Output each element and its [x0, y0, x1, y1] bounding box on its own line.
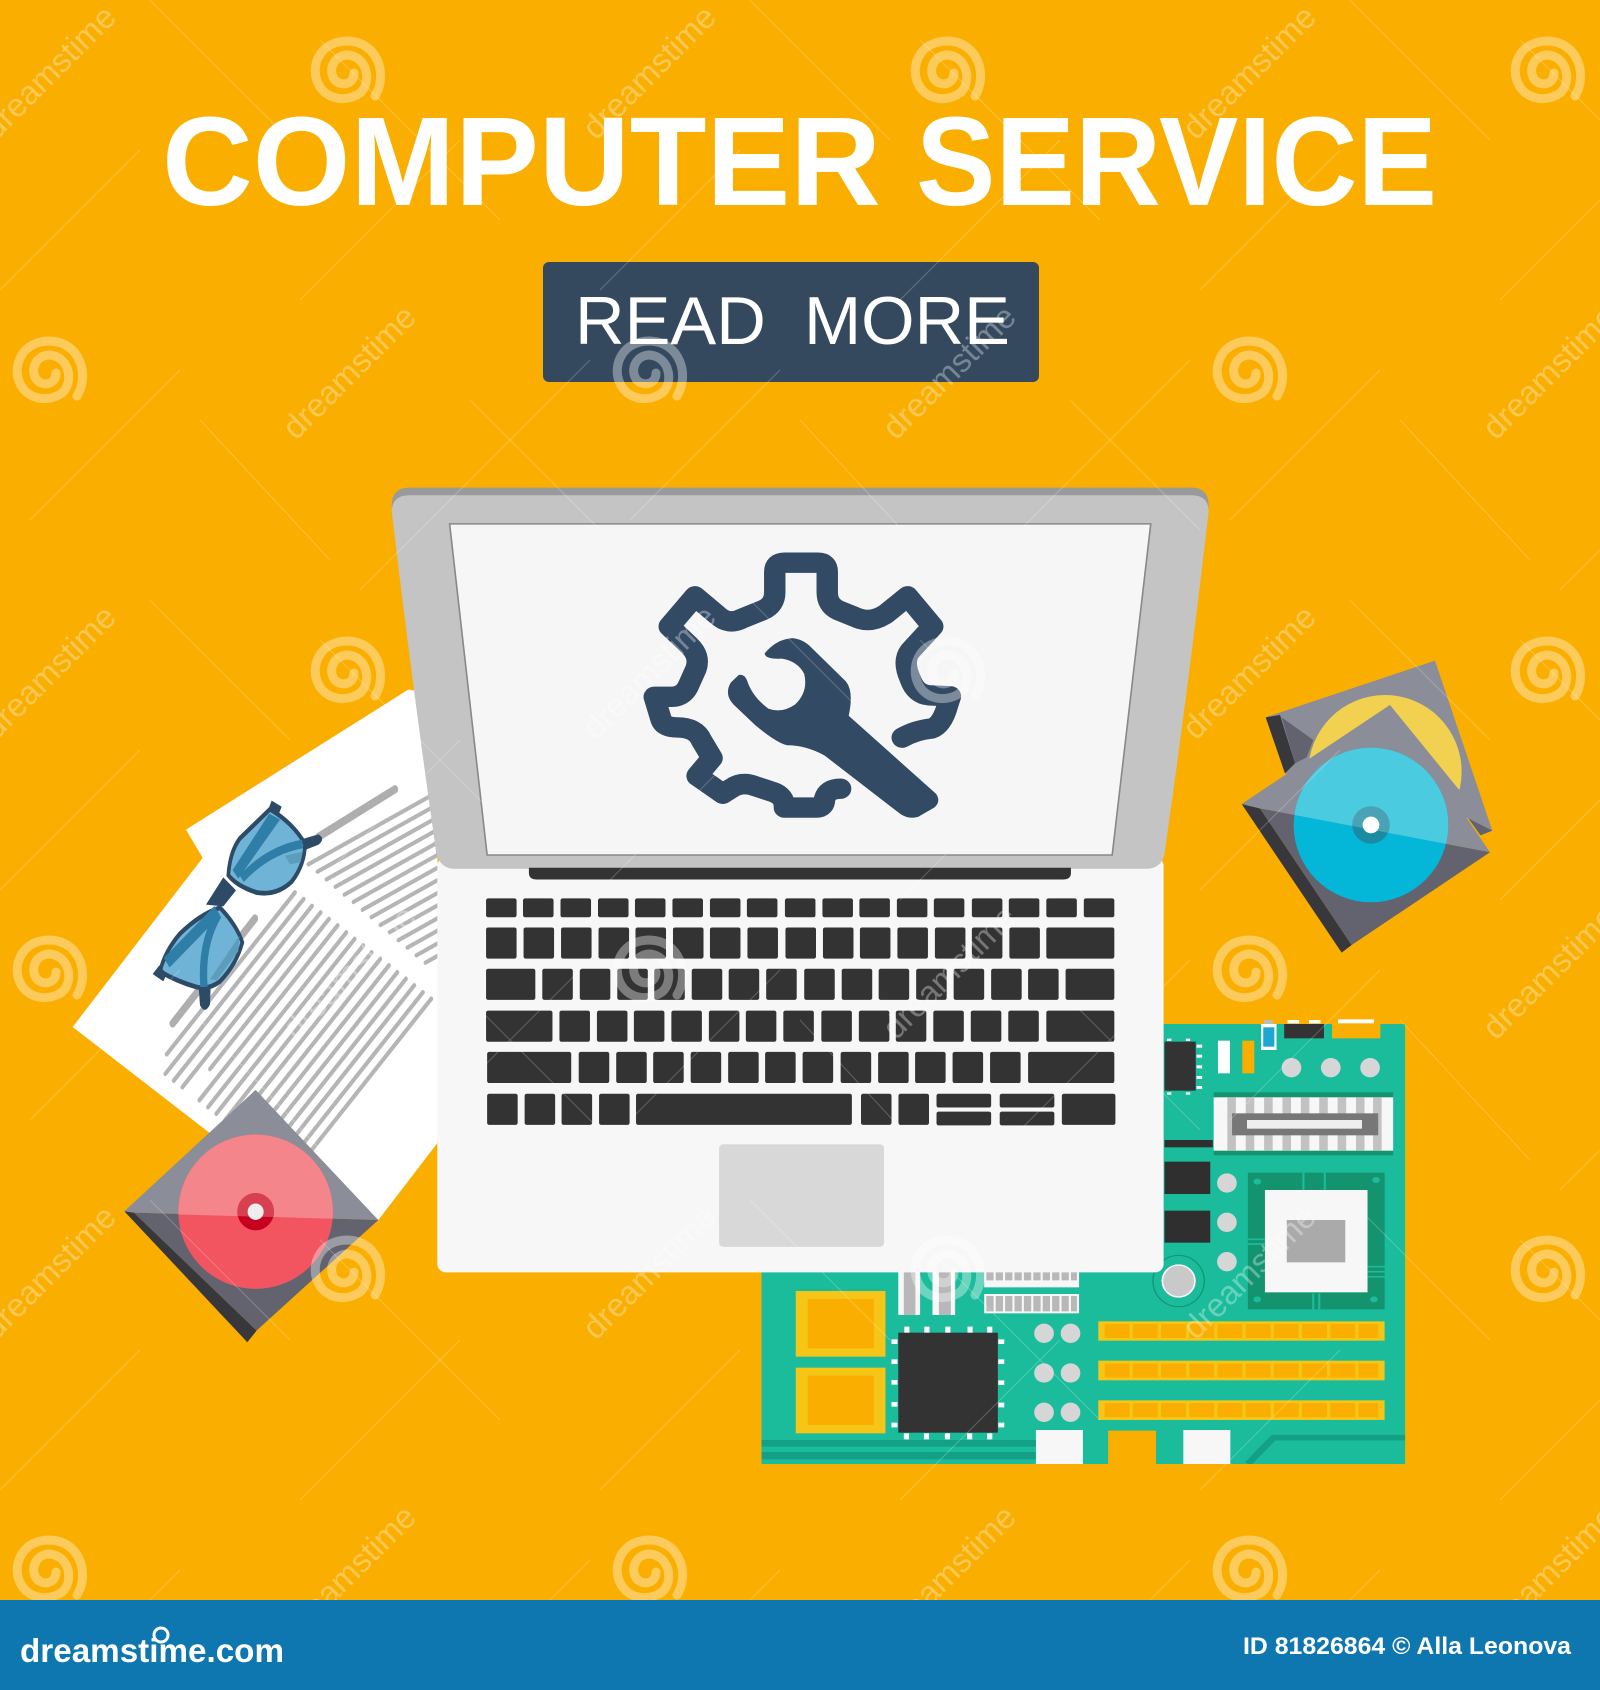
red disc [178, 1135, 333, 1289]
bridge [206, 877, 236, 906]
button: read more: READ MORE [575, 283, 1010, 359]
laptop [392, 488, 1209, 1272]
blue disc [1294, 748, 1448, 902]
disc cases: blue and yellow [1242, 661, 1492, 953]
watermark text: dreamstime [875, 898, 1023, 1046]
capacitors column [1217, 1173, 1237, 1271]
wrench [728, 638, 938, 818]
bottom connectors and traces [762, 1430, 1405, 1464]
title [162, 91, 1437, 232]
slots near laptop [898, 1270, 1079, 1315]
watermark text: dreamstime [275, 298, 423, 446]
footer logo: dreamstime.com [20, 1632, 284, 1669]
motherboard [762, 1019, 1405, 1464]
title: SERVICE [916, 91, 1437, 232]
button: read more [543, 262, 1039, 382]
laptop lid [392, 488, 1209, 869]
title: COMPUTER [162, 91, 881, 232]
CPU socket [1248, 1173, 1385, 1309]
watermark text: dreamstime [1175, 0, 1323, 146]
disc case: red [124, 1090, 378, 1342]
keyboard [486, 898, 1115, 1125]
laptop base [437, 858, 1164, 1272]
capacitors lower [1034, 1324, 1080, 1422]
hinge [529, 868, 1071, 879]
watermark text: dreamstime [1175, 598, 1323, 746]
watermark text: dreamstime [875, 298, 1023, 446]
top components [1218, 1019, 1374, 1073]
lens: upper [228, 809, 305, 893]
yellow pads [796, 1291, 885, 1433]
papers with text lines [73, 690, 559, 1220]
watermark text: dreamstime [275, 1498, 423, 1646]
watermark text: dreamstime [1175, 1198, 1323, 1346]
yellow disc [1310, 695, 1462, 790]
lens: lower [160, 908, 242, 988]
RAM slots [1098, 1321, 1385, 1420]
trackpad [719, 1144, 884, 1247]
watermark text: dreamstime [875, 1498, 1023, 1646]
connector [1214, 1092, 1393, 1155]
watermark text: dreamstime [575, 1198, 723, 1346]
watermark text: dreamstime [575, 598, 723, 746]
watermark text: dreamstime [275, 898, 423, 1046]
screen [450, 524, 1151, 855]
round capacitor [1153, 1255, 1204, 1307]
main chip [891, 1327, 1004, 1439]
watermark text: dreamstime [575, 0, 723, 146]
small chip [1165, 1039, 1202, 1095]
gear [654, 563, 950, 808]
footer credit: ID 81826864 © Alla Leonova [1243, 1633, 1572, 1660]
footer bar [0, 1600, 1600, 1690]
front case [1242, 804, 1352, 953]
glasses [153, 801, 322, 1010]
dark blocks [1165, 1140, 1213, 1243]
back case [1266, 661, 1492, 835]
icon: gear and wrench [654, 563, 950, 818]
capacitors row [1282, 1058, 1380, 1077]
